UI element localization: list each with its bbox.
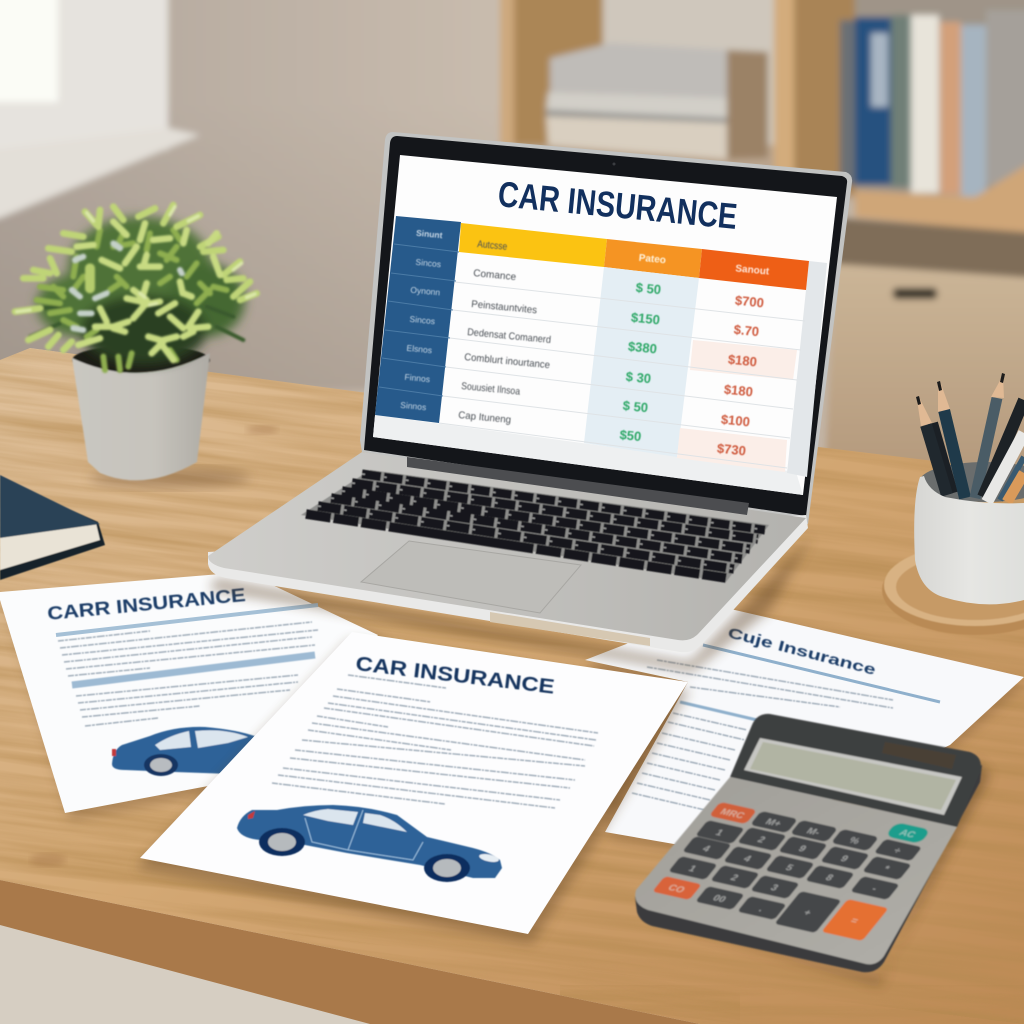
red prices: $100 bbox=[720, 412, 751, 429]
red prices: $700 bbox=[734, 293, 765, 310]
cup body bbox=[914, 476, 1024, 604]
potted plant bbox=[15, 205, 257, 488]
dark inner mass bbox=[37, 217, 245, 365]
keys: % bbox=[846, 836, 862, 846]
title: Cuje Insurance bbox=[726, 624, 877, 679]
foliage bbox=[15, 205, 257, 370]
row labels: Comblurt inourtance bbox=[464, 352, 551, 371]
row labels: Souusiet Ilnsoa bbox=[461, 381, 521, 398]
trackpad bbox=[361, 541, 581, 613]
calculator body bbox=[635, 777, 957, 964]
column headers: Sanout bbox=[735, 263, 770, 278]
keys: 2 bbox=[728, 873, 741, 883]
row labels: Dedensat Comanerd bbox=[467, 327, 551, 346]
keys: 1 bbox=[713, 828, 726, 838]
table bbox=[375, 216, 809, 472]
background room bbox=[0, 0, 1024, 490]
green prices: $150 bbox=[630, 310, 661, 327]
solar cell bbox=[882, 742, 956, 769]
calculator top panel bbox=[730, 714, 981, 827]
calculator bbox=[635, 714, 990, 985]
keys: 5 bbox=[783, 863, 796, 873]
keys: 9 bbox=[838, 854, 851, 864]
first column labels: Oynonn bbox=[410, 285, 441, 297]
right margin strip bbox=[787, 261, 827, 477]
pencil cup on coaster bbox=[882, 373, 1024, 635]
display bbox=[373, 155, 837, 495]
first column labels: Sincos bbox=[409, 314, 435, 326]
keys bbox=[652, 802, 931, 941]
top deck bbox=[208, 452, 806, 640]
keyboard bbox=[301, 470, 769, 582]
keys: 8 bbox=[823, 873, 836, 883]
first column labels: Sincos bbox=[415, 257, 441, 269]
keys: . bbox=[756, 905, 766, 914]
keys: 4 bbox=[741, 854, 754, 864]
keys: + bbox=[801, 908, 814, 918]
header cells bbox=[459, 223, 607, 267]
small car bbox=[112, 727, 260, 776]
keys: MRC bbox=[717, 807, 747, 821]
keys: 00 bbox=[710, 894, 728, 905]
cup interior bbox=[919, 462, 1024, 502]
row labels bbox=[458, 239, 551, 426]
stacked books bbox=[546, 43, 768, 159]
title: CARR INSURANCE bbox=[46, 585, 246, 624]
document: centre sheet bbox=[136, 632, 690, 944]
red prices: $730 bbox=[716, 441, 747, 458]
first column labels: Sinnos bbox=[400, 400, 427, 412]
upright books bbox=[840, 10, 1024, 200]
keys: M- bbox=[804, 827, 822, 838]
red prices: $180 bbox=[727, 352, 758, 369]
body copy bbox=[272, 675, 598, 808]
green prices: $ 30 bbox=[625, 369, 652, 386]
keys: M+ bbox=[763, 817, 784, 829]
desk bbox=[0, 345, 1024, 1024]
document: right sheet bbox=[585, 607, 1024, 858]
screen title: CAR INSURANCE bbox=[496, 173, 739, 237]
wood shelf unit bbox=[500, 0, 1024, 200]
highlighted cells bbox=[584, 267, 699, 457]
keys: 9 bbox=[796, 844, 809, 854]
title: CAR INSURANCE bbox=[354, 653, 556, 699]
red prices: $180 bbox=[723, 382, 754, 399]
laptop lid bbox=[360, 132, 852, 524]
closed notebook bbox=[0, 475, 105, 580]
pencils bbox=[916, 373, 1024, 502]
green prices bbox=[619, 280, 662, 444]
webcam bbox=[612, 162, 616, 166]
window bbox=[0, 0, 200, 220]
first column bbox=[375, 216, 461, 423]
green prices: $50 bbox=[619, 427, 642, 444]
row labels: Autcsse bbox=[477, 239, 508, 253]
column headers bbox=[638, 253, 770, 278]
first column labels bbox=[400, 228, 443, 412]
keys: * bbox=[881, 864, 892, 874]
wooden shelf board and drawer cabinet bbox=[825, 160, 1024, 490]
document: left sheet bbox=[0, 572, 385, 820]
large car bbox=[237, 805, 502, 882]
keys: = bbox=[848, 916, 861, 926]
pot bbox=[72, 345, 210, 480]
laptop base bbox=[208, 452, 808, 652]
keys: CO bbox=[665, 883, 687, 895]
body copy bbox=[58, 622, 318, 726]
keys: 3 bbox=[768, 883, 781, 893]
keys: AC bbox=[897, 828, 918, 840]
first column labels: Finnos bbox=[404, 372, 430, 384]
leaves bbox=[15, 205, 257, 370]
keys: 2 bbox=[755, 835, 768, 845]
wooden coaster bbox=[882, 544, 1024, 635]
green prices: $ 50 bbox=[635, 280, 662, 297]
laptop bbox=[208, 132, 852, 672]
front lip bbox=[208, 515, 808, 652]
row labels: Peinstauntvites bbox=[471, 299, 537, 316]
row labels: Cap Ituneng bbox=[458, 410, 512, 426]
green prices: $380 bbox=[627, 339, 658, 356]
first column labels: Elsnos bbox=[406, 343, 432, 355]
keys: 4 bbox=[700, 844, 713, 854]
red prices bbox=[716, 293, 765, 458]
keys: 1 bbox=[686, 864, 699, 874]
row labels: Comance bbox=[473, 268, 517, 283]
green prices: $ 50 bbox=[622, 398, 649, 415]
first column labels: Sinunt bbox=[416, 228, 443, 240]
keys: ÷ bbox=[891, 846, 904, 856]
red prices: $.70 bbox=[733, 322, 760, 339]
keys: - bbox=[869, 885, 879, 894]
hinge bbox=[407, 457, 749, 515]
LCD bbox=[744, 738, 962, 815]
column headers: Pateo bbox=[638, 253, 666, 266]
body copy bbox=[632, 660, 893, 810]
